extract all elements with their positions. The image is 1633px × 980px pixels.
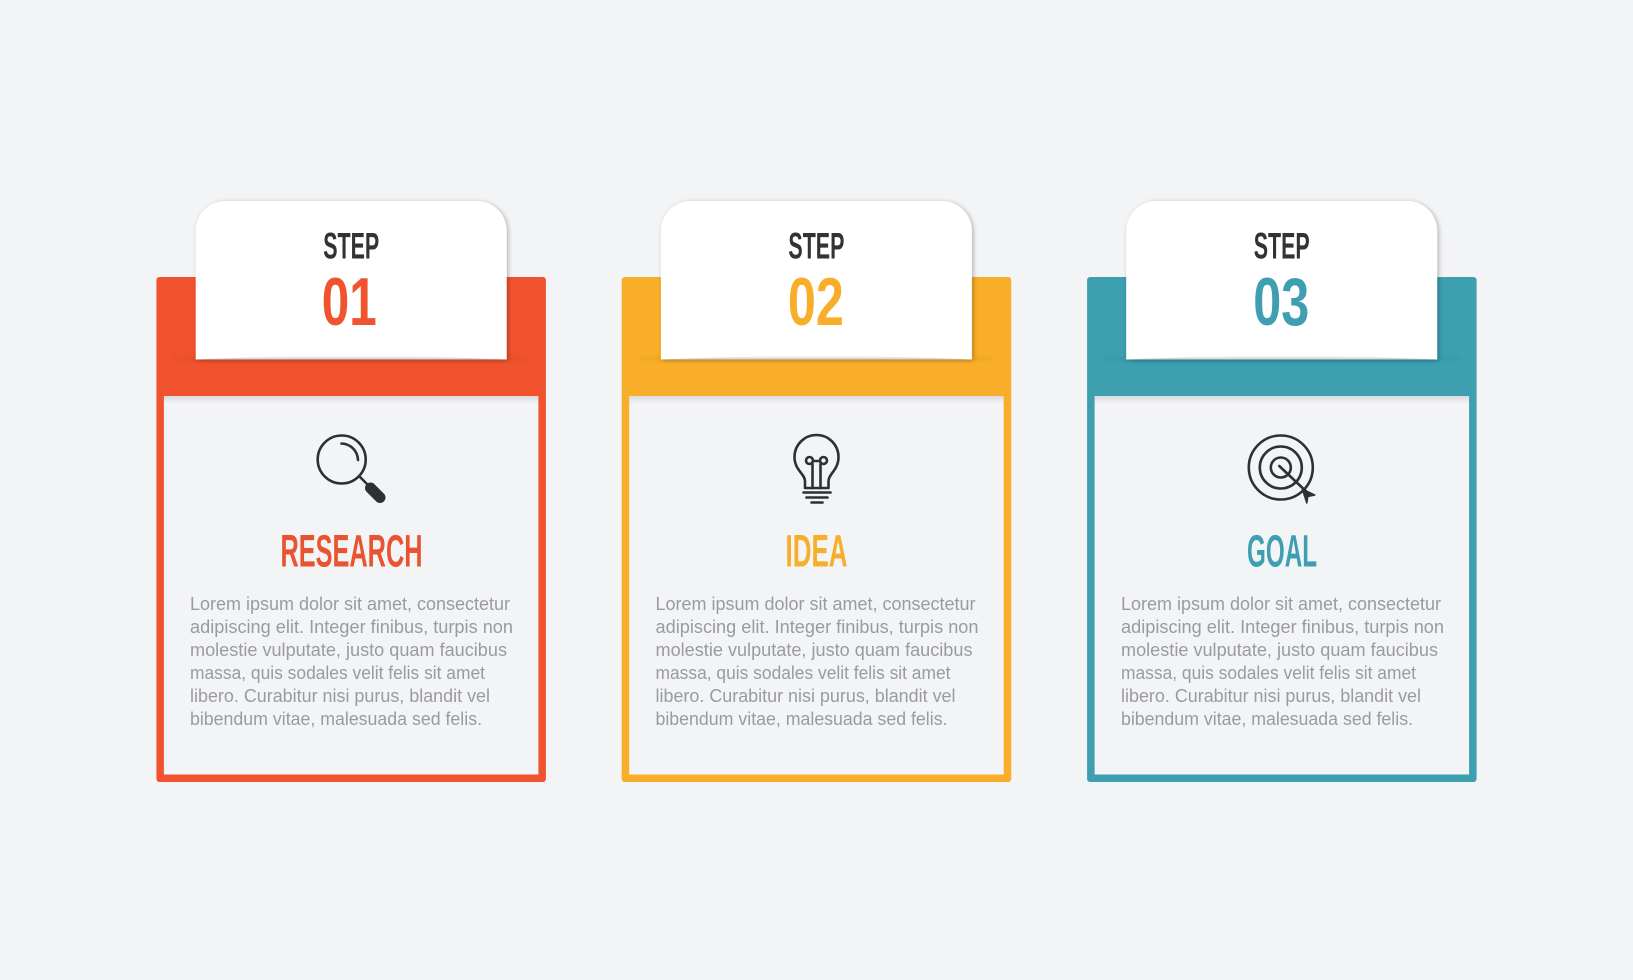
icon: magnifying glass [318,436,380,498]
body text: massa, quis sodales velit felis sit amet [656,662,950,683]
body text: Lorem ipsum dolor sit amet, consectetur [1121,593,1441,614]
body text: Lorem ipsum dolor sit amet, consectetur [190,593,510,614]
heading: research: RESEARCH [280,526,422,576]
body text: massa, quis sodales velit felis sit amet [190,662,485,683]
panel frame and header band [622,277,1011,782]
step number: 01 [322,264,377,340]
body text: molestie vulputate, justo quam faucibus [656,639,972,660]
body text: Lorem ipsum dolor sit amet, consectetur [656,593,976,614]
body text: adipiscing elit. Integer finibus, turpis non [1121,616,1444,637]
panel frame and header band [156,277,546,782]
heading: goal: GOAL [1247,526,1317,576]
panel: step 01 research [156,201,546,782]
step tab card [661,201,972,360]
body text: bibendum vitae, malesuada sed felis. [1121,708,1413,729]
step number: 02 [788,264,844,340]
step number: 03 [1253,264,1309,340]
body text [190,593,513,729]
panel: step 02 idea [622,201,1011,782]
step tab card [196,201,507,360]
body text: molestie vulputate, justo quam faucibus [1121,639,1438,660]
body text: massa, quis sodales velit felis sit amet [1121,662,1416,683]
heading: idea: IDEA [786,526,848,576]
icon: target with arrow [1249,436,1315,503]
body text: bibendum vitae, malesuada sed felis. [190,708,482,729]
body text: libero. Curabitur nisi purus, blandit vel [1121,685,1421,706]
step label: STEP [323,224,379,266]
body text [656,593,978,729]
body text: adipiscing elit. Integer finibus, turpis non [656,616,978,637]
panel frame and header band [1087,277,1477,782]
panel: step 03 goal [1087,201,1477,782]
step tab card [1126,201,1437,360]
step label: STEP [1254,224,1310,266]
body text [1121,593,1444,729]
icon: light bulb [794,435,838,502]
body text: libero. Curabitur nisi purus, blandit vel [190,685,490,706]
body text: bibendum vitae, malesuada sed felis. [656,708,948,729]
body text: libero. Curabitur nisi purus, blandit vel [656,685,956,706]
body text: adipiscing elit. Integer finibus, turpis non [190,616,513,637]
step label: STEP [788,224,844,266]
body text: molestie vulputate, justo quam faucibus [190,639,507,660]
